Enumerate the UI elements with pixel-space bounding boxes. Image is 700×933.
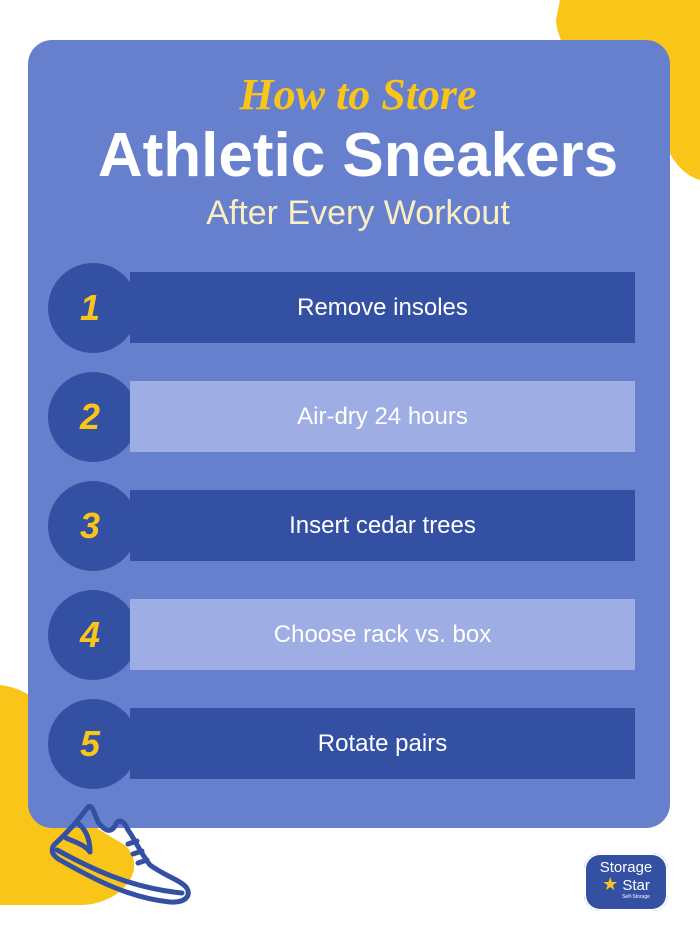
text: 5 (80, 723, 100, 764)
logo: Storage Star: Storage (600, 859, 652, 876)
text: Remove insoles (297, 294, 468, 320)
text: 3 (80, 505, 100, 546)
text: 1 (80, 287, 100, 328)
step 2 (48, 372, 635, 462)
text: 4 (80, 614, 100, 655)
text: Insert cedar trees (289, 512, 476, 538)
step 4 (48, 590, 635, 680)
text: Rotate pairs (318, 730, 447, 756)
text: 2 (80, 396, 100, 437)
text: Air-dry 24 hours (297, 402, 468, 430)
logo: Storage Star (584, 853, 668, 911)
step 3 (48, 481, 635, 571)
step 5 (48, 699, 635, 789)
step 1 (48, 263, 635, 353)
icon: sneaker (50, 804, 191, 905)
logo: Storage Star: Self-Storage (622, 894, 650, 900)
title (98, 70, 618, 232)
title: How to Store (239, 70, 477, 119)
title: After Every Workout (206, 194, 510, 232)
logo: Storage Star: ★ Star (602, 874, 650, 894)
main panel (28, 40, 670, 828)
title: Athletic Sneakers (98, 121, 618, 190)
text: Choose rack vs. box (274, 620, 491, 648)
